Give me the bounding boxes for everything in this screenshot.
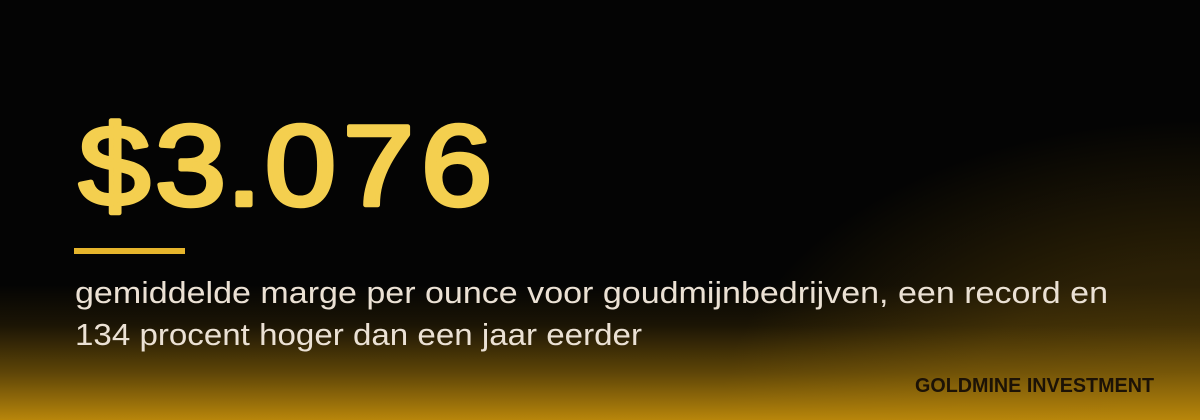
description line 1: gemiddelde marge per ounce voor goudmijnbedrijven, een record en <box>75 275 1108 310</box>
brand label: GOLDMINE INVESTMENT <box>915 375 1154 397</box>
description text <box>75 275 1108 352</box>
description line 2: 134 procent hoger dan een jaar eerder <box>75 317 642 352</box>
headline number: $3.076 <box>79 101 492 229</box>
accent rule <box>74 248 185 254</box>
